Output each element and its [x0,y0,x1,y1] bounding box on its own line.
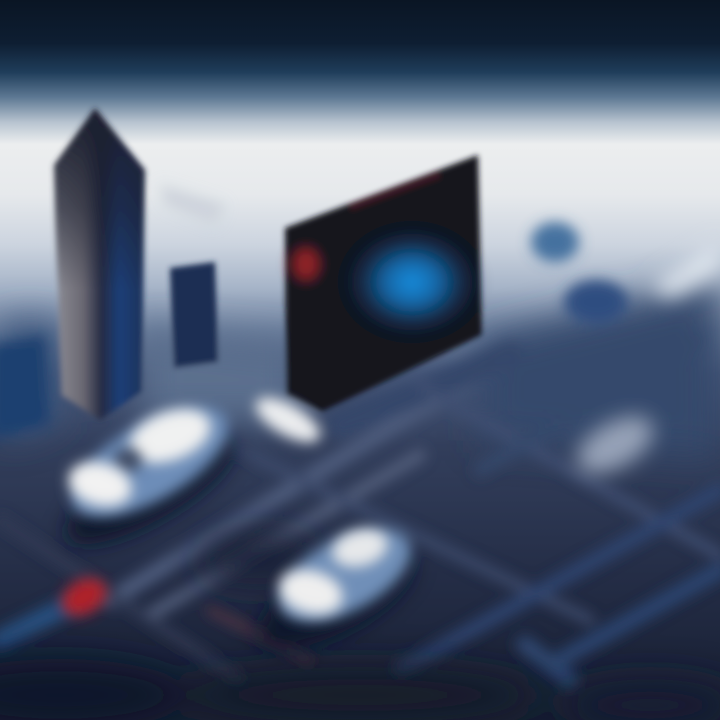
white window [122,399,218,473]
building: tall tower [54,108,145,420]
blue glow [340,224,484,340]
panel body [285,155,482,412]
ground road grid [0,340,720,680]
faint sketch beside tower [160,185,225,225]
white window [275,563,347,621]
blue blobs [531,222,628,324]
white pad below screen [249,389,327,451]
tower body [54,108,145,420]
white window [328,523,392,573]
dark gap [114,448,142,472]
red top edge [350,175,440,208]
dark ground patches [0,535,720,720]
shadow [245,532,425,668]
device: left car [53,385,247,563]
white window [64,455,136,513]
shadow [53,417,247,563]
building: left low block [0,335,50,440]
screen: large dark panel [285,155,484,412]
building: small dark block [170,262,218,368]
distant skyline haze [0,280,720,460]
red marker on road [55,570,113,624]
body [265,509,425,641]
device: center car [245,509,425,668]
red indicator [291,246,321,282]
body [55,385,245,539]
tower dark top [54,108,145,290]
device: right car [568,405,662,485]
light haze right [650,240,720,298]
